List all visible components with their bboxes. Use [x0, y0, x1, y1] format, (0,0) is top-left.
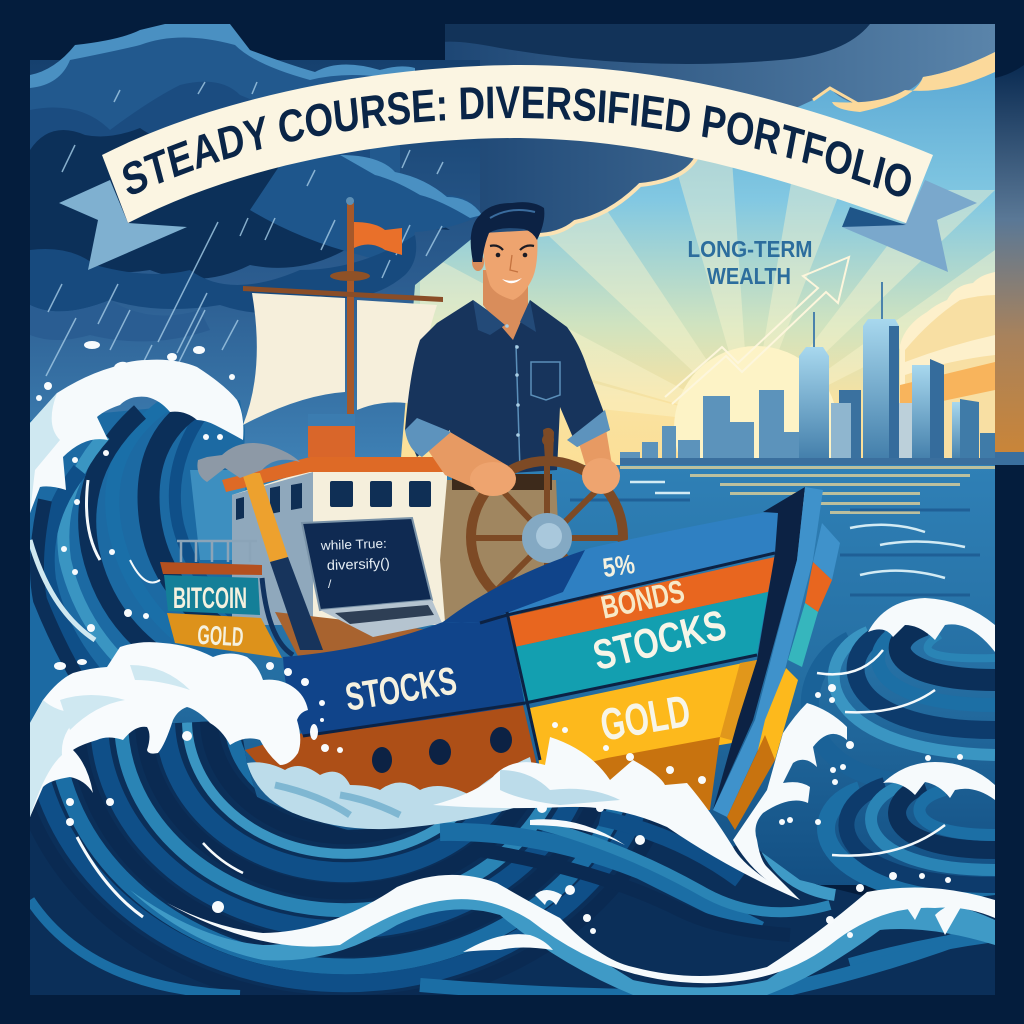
banner right tail — [842, 180, 977, 272]
trousers — [440, 480, 560, 622]
left cuff — [405, 418, 451, 457]
laptop: while True: — [320, 536, 387, 553]
neck — [483, 270, 528, 342]
laptop: / — [328, 577, 332, 591]
title: STEADY COURSE: DIVERSIFIED PORTFOLIO — [123, 86, 911, 196]
sky background — [401, 52, 995, 465]
portholes — [372, 727, 512, 773]
bow — [713, 487, 805, 810]
sails — [243, 293, 437, 425]
city skyline — [620, 282, 998, 465]
face — [490, 246, 534, 283]
stocks band: STOCKS — [588, 601, 731, 679]
front wave crest — [30, 642, 308, 817]
sun — [674, 346, 834, 458]
cabin — [222, 414, 448, 625]
right storm cloud — [400, 24, 995, 235]
right lower wave swirl — [826, 785, 995, 900]
long-term wealth arrow — [665, 257, 849, 404]
right forearm — [580, 432, 612, 466]
stern with bitcoin and gold bands: BITCOIN — [173, 582, 247, 615]
stern with bitcoin and gold bands — [160, 541, 293, 658]
right side sunset clouds — [900, 272, 995, 465]
left storm clouds — [30, 24, 482, 470]
ship wheel — [470, 428, 625, 613]
laptop — [302, 518, 442, 637]
gold band — [530, 660, 757, 775]
hair — [471, 202, 544, 262]
stocks band — [515, 592, 768, 703]
long-term wealth label: WEALTH — [707, 263, 791, 289]
right cuff — [567, 410, 610, 447]
gold band: GOLD — [597, 685, 694, 751]
right upper wave swirl — [810, 625, 995, 782]
mast and flag — [243, 197, 443, 414]
sun rays — [420, 160, 995, 417]
man at the helm — [405, 202, 612, 622]
hull — [245, 487, 840, 830]
head — [483, 230, 538, 300]
long-term wealth label: LONG-TERM — [688, 236, 812, 262]
title banner — [59, 65, 977, 272]
bonds band — [507, 557, 775, 647]
bonds band: BONDS — [598, 573, 688, 626]
hull stocks panel — [283, 610, 525, 736]
foreground sea — [11, 700, 995, 1003]
open sea — [30, 465, 995, 885]
shirt — [405, 300, 610, 477]
spray dots — [36, 341, 963, 938]
hull foam — [247, 703, 847, 900]
blue rim with 5 percent: 5% — [601, 549, 637, 583]
blue rim with 5 percent — [443, 510, 778, 623]
right wave crests — [868, 598, 995, 800]
stern with bitcoin and gold bands: GOLD — [197, 620, 244, 652]
wooden deck — [275, 612, 424, 656]
banner ribbon — [102, 65, 933, 223]
hull stocks panel: STOCKS — [342, 660, 460, 720]
hammer — [197, 443, 323, 650]
bottom ribbon wave — [130, 875, 995, 995]
hull lower brown — [245, 705, 536, 794]
laptop: diversify() — [327, 555, 390, 573]
big wave left — [30, 360, 245, 686]
sail boat — [160, 197, 840, 830]
right edge sunset strip — [995, 65, 1024, 465]
banner left tail — [59, 180, 187, 270]
left forearm — [428, 432, 508, 488]
long-term wealth label — [688, 241, 812, 284]
gripping hands — [470, 462, 516, 496]
